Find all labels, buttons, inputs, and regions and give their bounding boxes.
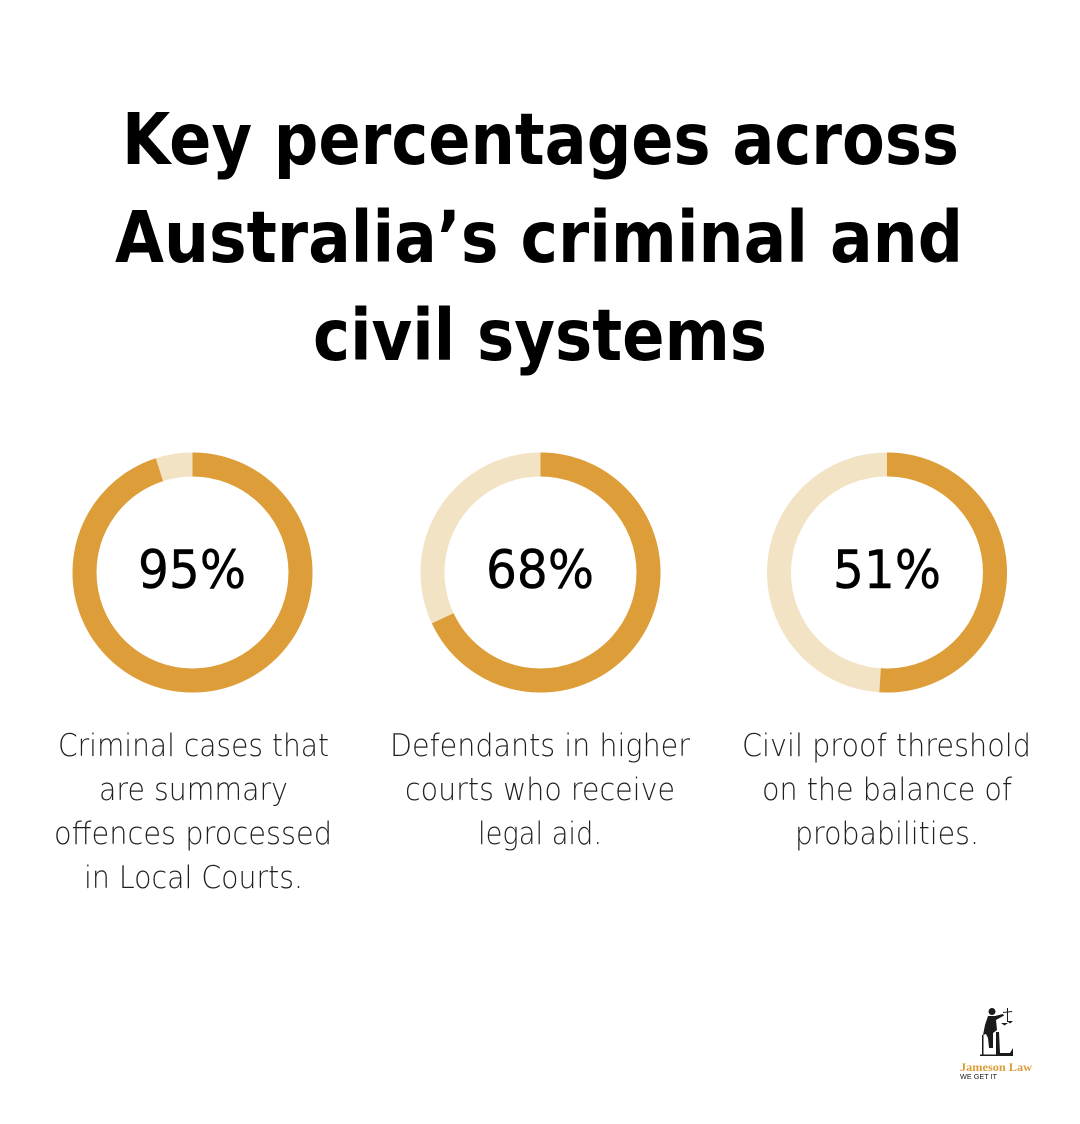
description: summary offences: Criminal cases that bbox=[58, 728, 329, 764]
description: civil threshold: Civil proof threshold bbox=[742, 728, 1031, 764]
title bbox=[115, 98, 963, 377]
value: 68%: 68% bbox=[486, 540, 594, 601]
donut chart: 95% bbox=[84, 464, 300, 680]
description: summary offences bbox=[54, 728, 332, 896]
value: 51%: 51% bbox=[833, 540, 941, 601]
logo: Jameson Law bbox=[960, 1008, 1033, 1081]
description: legal aid: Defendants in higher bbox=[390, 728, 690, 764]
panel: 51% civil threshold bbox=[742, 464, 1031, 852]
title: Australia’s criminal and bbox=[115, 196, 963, 279]
description: summary offences: in Local Courts. bbox=[84, 860, 303, 896]
description: civil threshold bbox=[742, 728, 1031, 852]
panel: 95% summary offences bbox=[54, 464, 332, 896]
description: civil threshold: on the balance of bbox=[762, 772, 1012, 808]
description: legal aid bbox=[390, 728, 690, 852]
description: summary offences: are summary bbox=[99, 772, 288, 808]
logo tagline: WE GET IT bbox=[960, 1074, 998, 1081]
icon: lady justice and L bbox=[980, 1008, 1013, 1056]
title: civil systems bbox=[313, 294, 767, 377]
description: legal aid: courts who receive bbox=[405, 772, 675, 808]
description: civil threshold: probabilities. bbox=[795, 816, 979, 852]
title: Key percentages across bbox=[122, 98, 959, 181]
value: 95%: 95% bbox=[138, 540, 246, 601]
donut chart: 51% bbox=[779, 464, 995, 680]
panel: 68% legal aid bbox=[390, 464, 690, 852]
logo wordmark: Jameson Law bbox=[960, 1062, 1033, 1074]
description: summary offences: offences processed bbox=[54, 816, 332, 852]
donut chart: 68% bbox=[432, 464, 648, 680]
description: legal aid: legal aid. bbox=[478, 816, 602, 852]
